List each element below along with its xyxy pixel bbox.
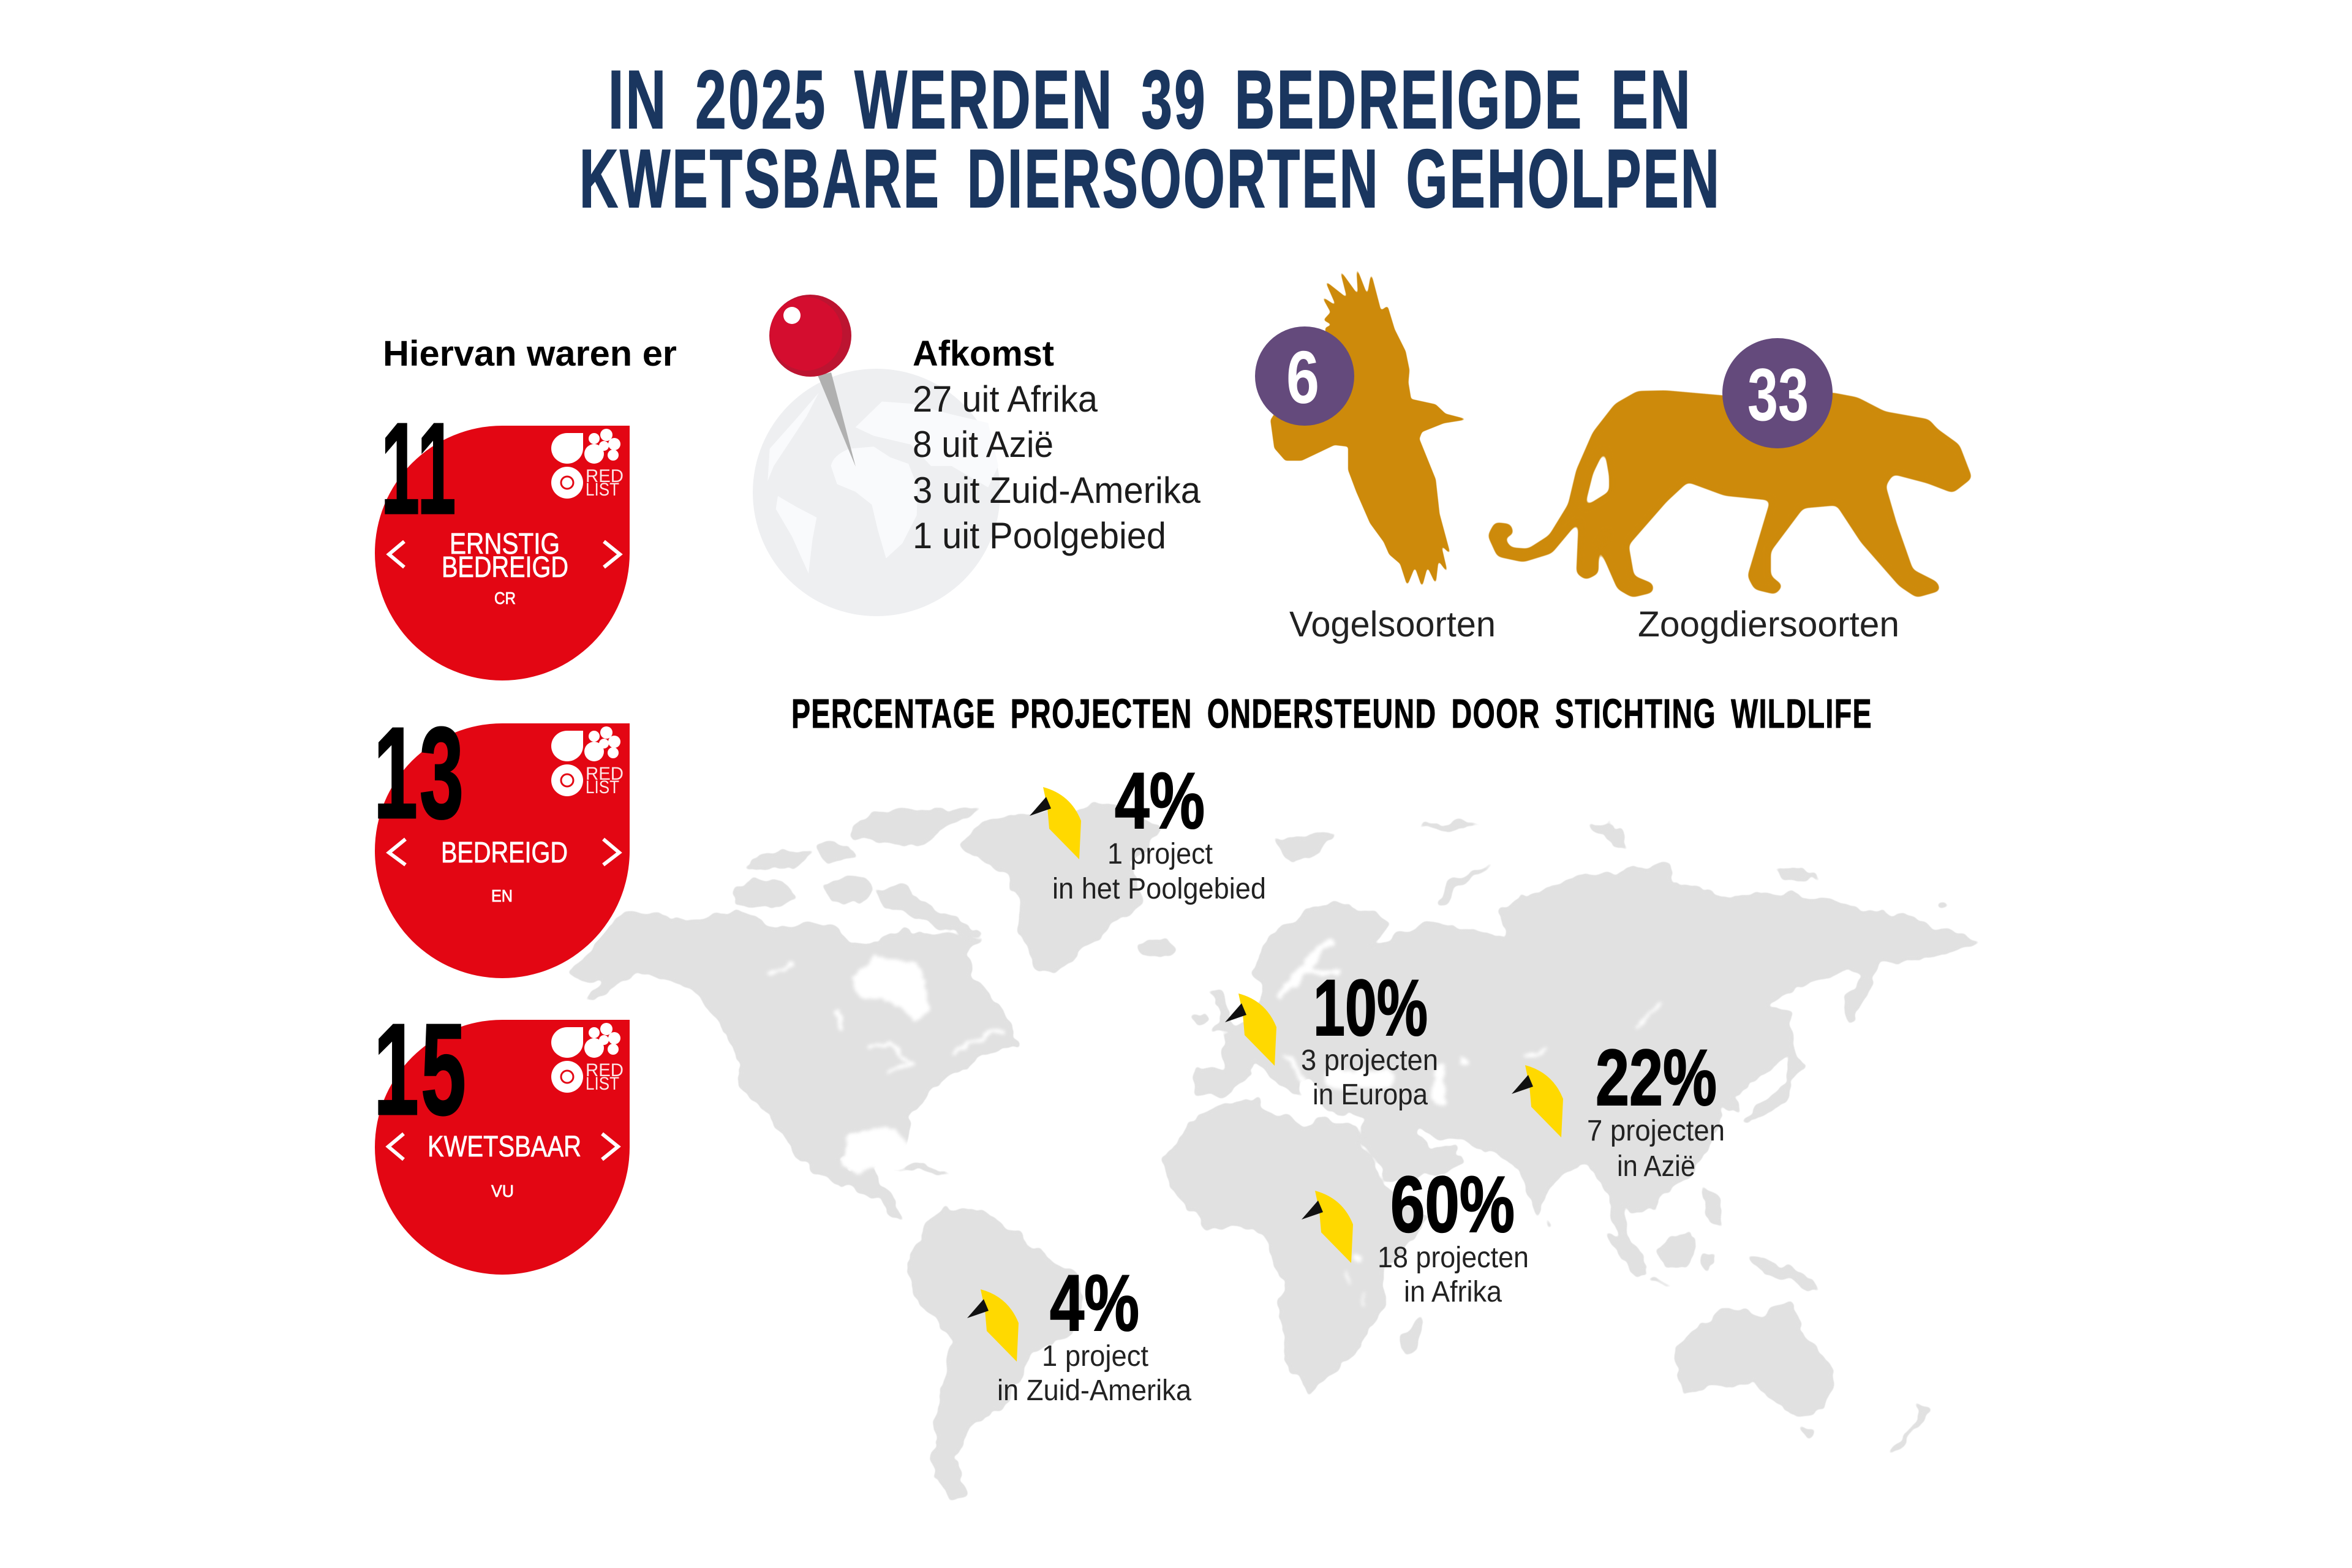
globe with red pin — [753, 295, 1000, 616]
callout: afrika: 60% — [1390, 1159, 1515, 1249]
status label: BEDREIGD — [442, 551, 568, 584]
callout: azie — [1587, 1033, 1725, 1183]
callout: azie: 22% — [1596, 1033, 1717, 1122]
status label — [442, 528, 568, 608]
subheading: PERCENTAGE PROJECTEN ONDERSTEUND DOOR STICHTING WILDLIFE — [791, 691, 1872, 737]
logo: red list: RED — [586, 764, 624, 784]
status label: VU — [491, 1182, 514, 1200]
text block: afkomst — [913, 334, 1201, 556]
callout: afrika: 18 projecten — [1378, 1242, 1529, 1274]
marker: afrika — [1302, 1191, 1353, 1263]
callout: zuid-amerika — [997, 1258, 1191, 1407]
text block: afkomst: Afkomst — [913, 334, 1054, 374]
badge: bedreigd — [374, 700, 630, 978]
logo: red list: RED — [586, 466, 624, 486]
bird silhouette with count — [1255, 267, 1468, 587]
label: vogelsoorten: Vogelsoorten — [1289, 605, 1496, 644]
callout: zuid-amerika: 4% — [1050, 1258, 1139, 1348]
status label: ERNSTIG — [450, 528, 560, 560]
status label — [441, 837, 568, 905]
callout: poolgebied: 1 project — [1107, 838, 1213, 870]
world map — [568, 802, 1983, 1501]
logo: red list — [551, 726, 624, 797]
badge: kwetsbaar — [374, 997, 630, 1275]
status label — [428, 1131, 581, 1200]
marker: europa — [1225, 993, 1276, 1066]
marker: poolgebied — [1030, 787, 1081, 859]
leopard silhouette with count — [1489, 338, 1970, 597]
callout: europa: 3 projecten — [1301, 1044, 1438, 1077]
callout: europa — [1301, 963, 1438, 1111]
callout: afrika — [1378, 1159, 1529, 1308]
logo: red list: RED — [586, 1060, 624, 1080]
callout: zuid-amerika: 1 project — [1042, 1340, 1148, 1373]
count: 15: 15 — [374, 997, 468, 1142]
label: zoogdiersoorten: Zoogdiersoorten — [1638, 605, 1899, 644]
status label: EN — [491, 886, 513, 905]
badge: ernstig bedreigd — [375, 396, 630, 680]
count: 11: 11 — [381, 396, 458, 541]
logo: red list: LIST — [586, 777, 619, 797]
callout: azie: in Azië — [1617, 1150, 1695, 1183]
status label: CR — [494, 589, 516, 608]
bird silhouette with count: 6 — [1286, 336, 1319, 419]
map: africa and eurasia — [1164, 863, 1983, 1395]
text block: afkomst: 3 uit Zuid-Amerika — [913, 470, 1201, 511]
chevrons — [389, 541, 620, 567]
text block: afkomst: 8 uit Azië — [913, 424, 1054, 465]
title: IN 2025 WERDEN 39 BEDREIGDE EN — [608, 53, 1692, 146]
logo: red list: LIST — [586, 1074, 619, 1094]
count: 13: 13 — [374, 700, 466, 845]
callout: europa: in Europa — [1313, 1079, 1428, 1111]
leopard silhouette with count: 33 — [1747, 353, 1809, 436]
logo: red list — [551, 429, 624, 500]
callout: europa: 10% — [1313, 963, 1428, 1052]
callout: poolgebied: 4% — [1115, 756, 1205, 845]
text block: afkomst: 27 uit Afrika — [913, 379, 1098, 420]
map: americas and arctic — [568, 802, 1339, 1501]
chevrons — [389, 839, 619, 865]
status label: KWETSBAAR — [428, 1131, 581, 1163]
callout: zuid-amerika: in Zuid-Amerika — [997, 1374, 1191, 1407]
title — [579, 53, 1721, 225]
logo: red list: LIST — [586, 480, 619, 500]
status label: BEDREIGD — [441, 837, 568, 869]
callout: afrika: in Afrika — [1404, 1276, 1502, 1308]
chevrons — [388, 1134, 618, 1159]
marker: zuid-amerika — [967, 1289, 1019, 1362]
marker: azie — [1512, 1065, 1563, 1137]
map: asia-pacific islands and oceania — [1399, 822, 1951, 1454]
title: KWETSBARE DIERSOORTEN GEHOLPEN — [579, 132, 1721, 225]
logo: red list — [551, 1023, 624, 1094]
text block: afkomst: 1 uit Poolgebied — [913, 515, 1166, 556]
callout: poolgebied — [1052, 756, 1266, 905]
callout: poolgebied: in het Poolgebied — [1052, 873, 1266, 905]
heading: hierarchy of red list: Hiervan waren er — [383, 334, 677, 374]
callout: azie: 7 projecten — [1587, 1115, 1725, 1147]
